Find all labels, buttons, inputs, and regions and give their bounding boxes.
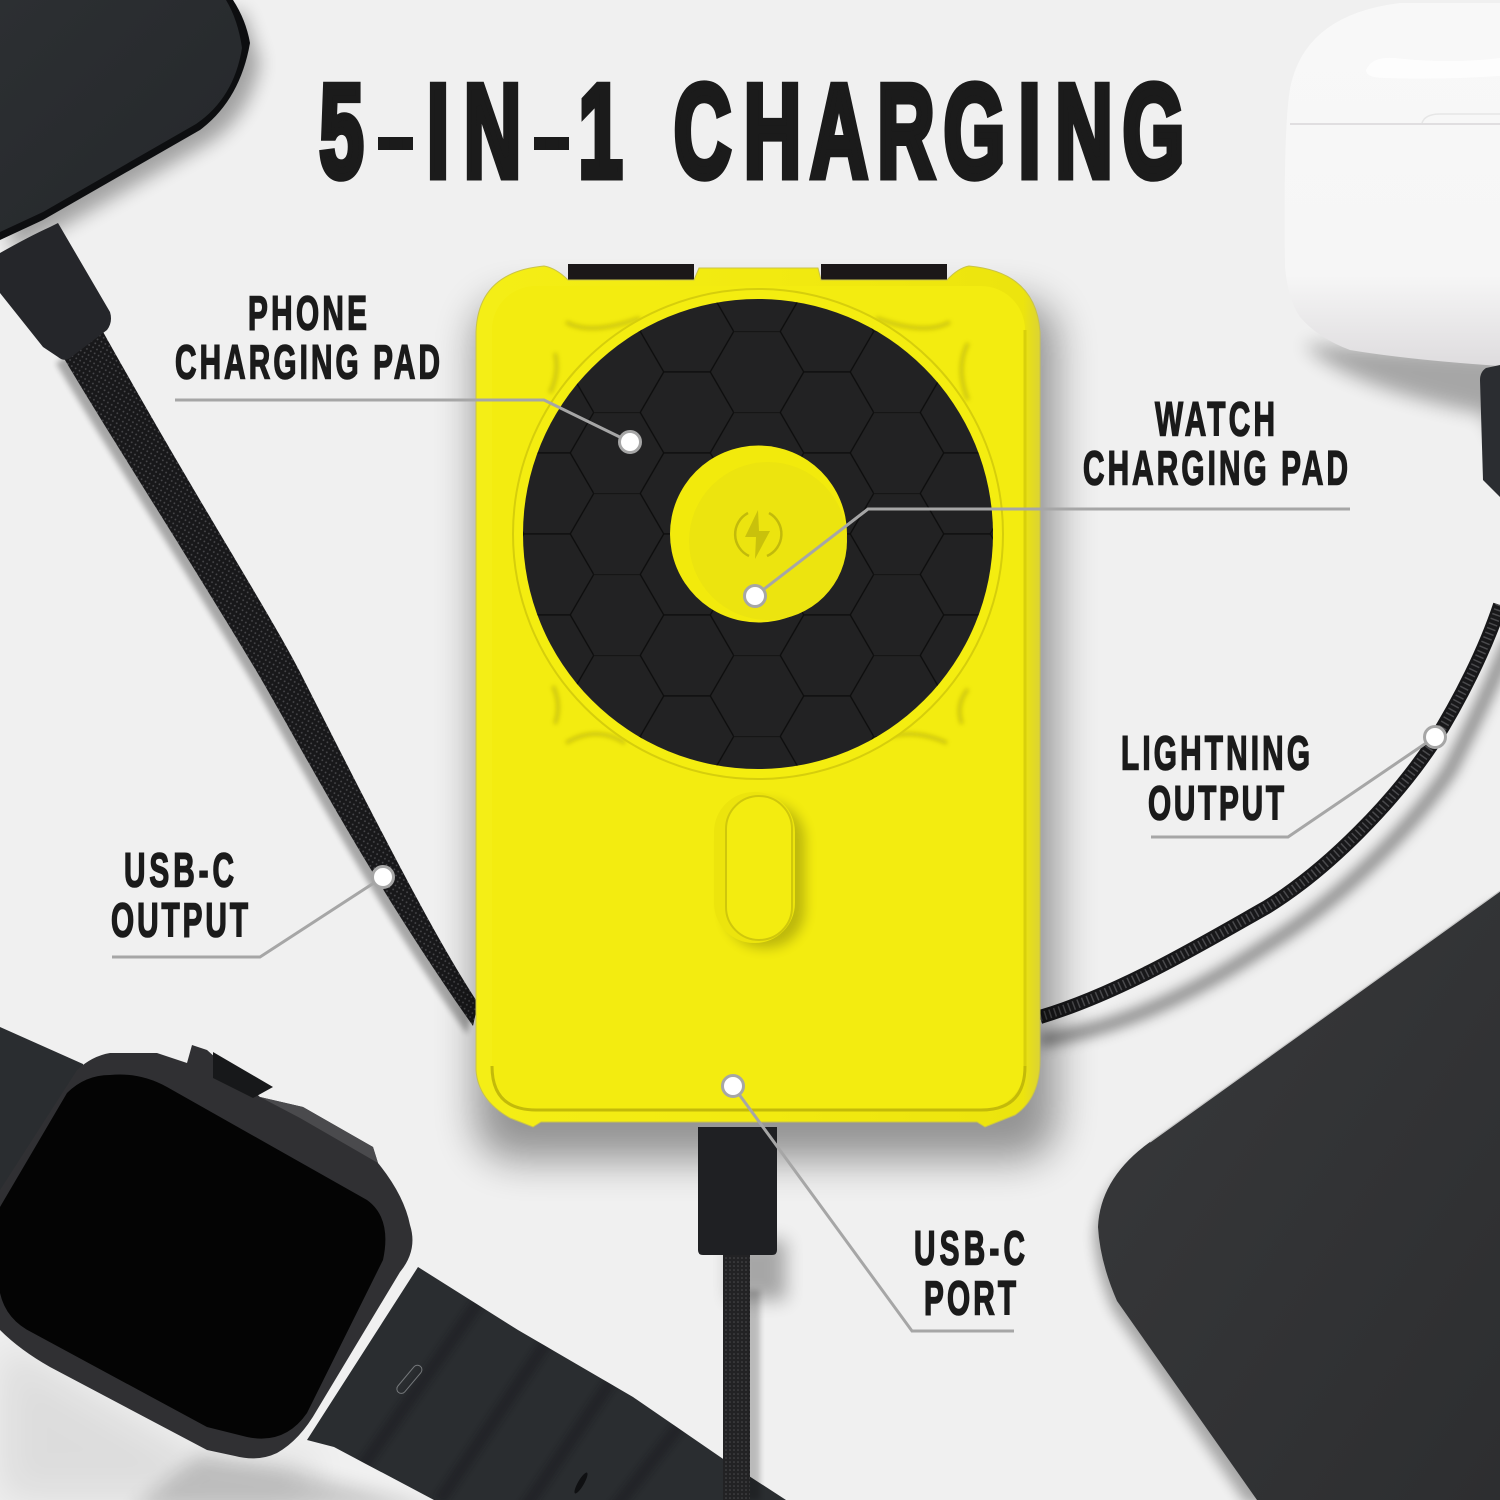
label: USB-C port bbox=[915, 1230, 1025, 1316]
body inner panel bbox=[1023, 319, 1025, 1068]
body bbox=[476, 266, 1040, 1127]
dot: USB-C port bbox=[722, 1076, 744, 1096]
watch charging pad bbox=[670, 446, 847, 622]
band pill mark bbox=[396, 1364, 422, 1394]
label: watch charging pad: WATCH bbox=[1155, 393, 1275, 446]
pad corner embossing bbox=[550, 318, 968, 743]
cable: USB-C port bbox=[698, 1127, 786, 1500]
cable: lightning output bbox=[1040, 365, 1500, 1040]
top ports bbox=[568, 264, 947, 280]
title: - bbox=[387, 86, 405, 187]
device: phone top left bbox=[0, 0, 260, 252]
leader lines bbox=[112, 400, 1435, 1331]
connector: lightning plug bbox=[1480, 365, 1500, 497]
band hole bbox=[574, 1472, 588, 1494]
phone charging pad bbox=[513, 289, 1003, 779]
connector: USB-C plug bbox=[698, 1127, 777, 1255]
label: lightning output: OUTPUT bbox=[1148, 777, 1284, 830]
magnetic button bbox=[714, 792, 805, 948]
title: - bbox=[543, 86, 561, 187]
label: USB-C port: USB-C bbox=[914, 1222, 1025, 1275]
watch crown bbox=[213, 1052, 273, 1098]
title: IN bbox=[427, 58, 521, 206]
label: USB-C output: USB-C bbox=[124, 844, 234, 897]
label: lightning output bbox=[1122, 735, 1309, 821]
label: watch charging pad bbox=[1084, 401, 1348, 486]
title bbox=[319, 80, 1182, 182]
device: dark tablet bottom right bbox=[1094, 891, 1500, 1500]
dot: phone charging pad bbox=[620, 432, 640, 452]
power bank bbox=[475, 264, 1057, 1160]
device: earbuds case top right bbox=[1290, 58, 1500, 432]
label: USB-C port: PORT bbox=[924, 1272, 1016, 1325]
watch screen bbox=[0, 1074, 385, 1439]
dot: watch charging pad bbox=[744, 586, 766, 606]
label: USB-C output bbox=[112, 852, 248, 938]
label: lightning output: LIGHTNING bbox=[1121, 727, 1310, 780]
device: smartwatch bottom left bbox=[0, 1027, 786, 1500]
connector: USB-C plug bbox=[0, 223, 111, 360]
label: USB-C output: OUTPUT bbox=[111, 894, 248, 947]
body shadow bbox=[475, 300, 1057, 1160]
dot: lightning output bbox=[1424, 726, 1446, 748]
dot: USB-C output bbox=[372, 866, 394, 888]
icon: lightning power bbox=[735, 510, 781, 559]
label: phone charging pad: PHONE bbox=[248, 287, 367, 340]
label: phone charging pad bbox=[176, 295, 440, 380]
watch case bbox=[0, 1045, 412, 1458]
label: phone charging pad: CHARGING PAD bbox=[175, 336, 440, 389]
label: watch charging pad: CHARGING PAD bbox=[1083, 442, 1348, 495]
watch band bbox=[0, 1027, 84, 1190]
title: 5 bbox=[320, 58, 364, 206]
cable: USB-C output to phone bbox=[0, 223, 478, 1034]
title: 1 CHARGING bbox=[579, 58, 1184, 206]
